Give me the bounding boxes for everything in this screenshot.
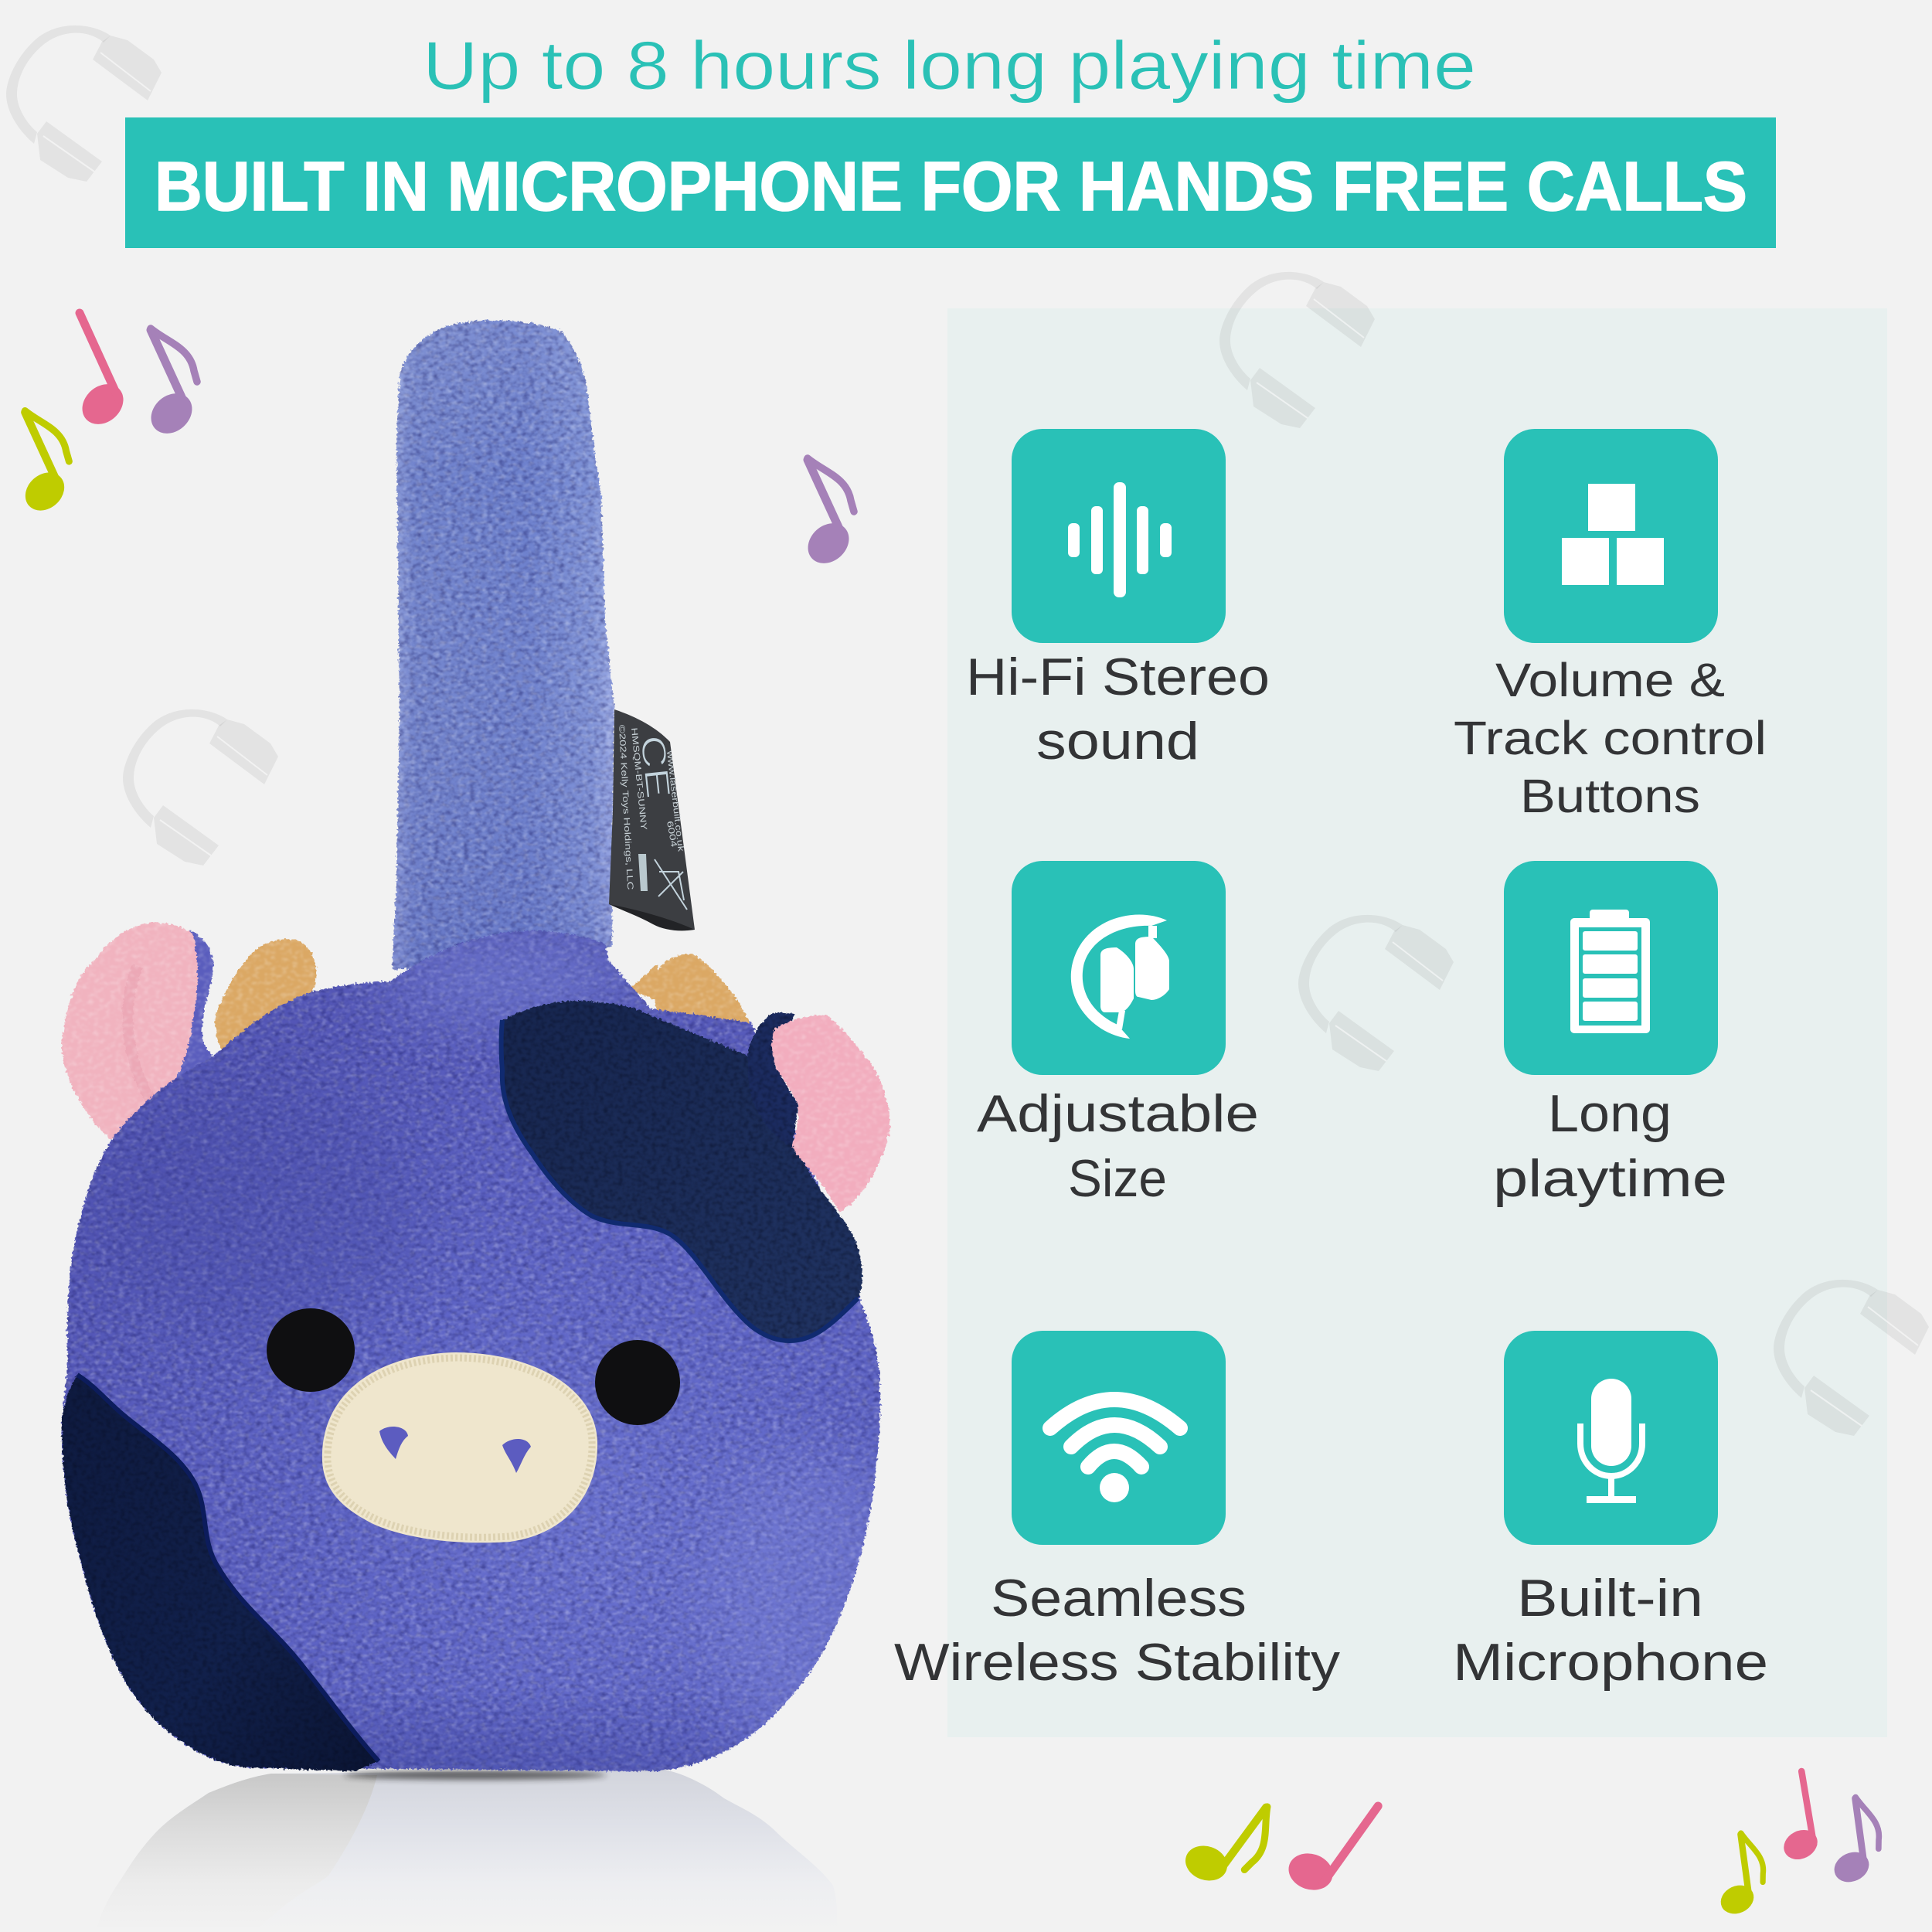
label: Hi-Fi Stereo [966, 648, 1270, 706]
top right dark patch [501, 1001, 862, 1341]
snout [322, 1352, 597, 1543]
music notes: bottom centre [1170, 1801, 1404, 1910]
icon tile: battery [1504, 861, 1718, 1075]
music notes: bottom right cluster [1710, 1770, 1893, 1927]
eyes [267, 1308, 680, 1425]
title: Up to 8 hours long playing time [423, 27, 1476, 104]
icon tile: wifi [1012, 1331, 1226, 1545]
label tag [609, 709, 695, 930]
right ear [748, 1012, 798, 1147]
headband stem [392, 321, 614, 970]
icon tile: microphone [1504, 1331, 1718, 1545]
label: Adjustable [977, 1084, 1259, 1143]
label: Long [1548, 1084, 1672, 1143]
lower left dark patch [62, 1375, 379, 1771]
feature: long playtime [1493, 861, 1727, 1208]
feature: long playtime: playtime [1493, 1149, 1727, 1208]
label tag: www.laserbuilt.co.uk [665, 750, 685, 852]
icon tile: rotating headphones [1012, 861, 1226, 1075]
feature: built-in microphone: Microphone [1453, 1633, 1768, 1692]
feature: volume and track control: Track control [1454, 712, 1767, 764]
feature: built-in microphone [1453, 1331, 1768, 1692]
head body [62, 930, 880, 1771]
feature: adjustable size [977, 861, 1259, 1208]
feature: Hi-Fi Stereo sound: sound [1036, 712, 1199, 770]
head soft shading [85, 927, 920, 1824]
feature: volume and track control [1454, 429, 1767, 822]
music notes: top left cluster [18, 313, 200, 519]
nostrils [379, 1427, 531, 1473]
label tag: CE [633, 733, 677, 801]
label tag: 6004 [665, 820, 679, 848]
label tag: HMSQM-BT-SUNNY [629, 727, 648, 832]
icon tile: sound wave [1012, 429, 1226, 643]
plush headphone product [62, 321, 920, 1824]
left ear [62, 923, 219, 1140]
label: Built-in [1517, 1569, 1703, 1628]
feature: seamless wireless stability [894, 1331, 1340, 1692]
right ear pink lining [772, 1015, 890, 1213]
feature: seamless wireless stability: Wireless Stability [894, 1633, 1340, 1692]
feature: Hi-Fi Stereo sound [966, 429, 1270, 770]
label: Volume & [1495, 654, 1725, 706]
headline banner [125, 117, 1776, 248]
label: Seamless [991, 1569, 1247, 1628]
lower left patch seam [77, 1375, 379, 1761]
feature panel background [947, 308, 1887, 1737]
top right patch seam [501, 1020, 858, 1341]
horns [215, 939, 754, 1078]
icon tile: blocks [1504, 429, 1718, 643]
feature: volume and track control: Buttons [1520, 770, 1700, 822]
music note: purple centre [800, 458, 857, 571]
watermark headphones [6, 26, 1929, 1436]
label tag: ©2024 Kelly Toys Holdings, LLC [617, 725, 634, 890]
feature: adjustable size: Size [1068, 1149, 1167, 1208]
floor reflection [95, 1770, 838, 1932]
headline banner: BUILT IN MICROPHONE FOR HANDS FREE CALLS [155, 148, 1747, 226]
